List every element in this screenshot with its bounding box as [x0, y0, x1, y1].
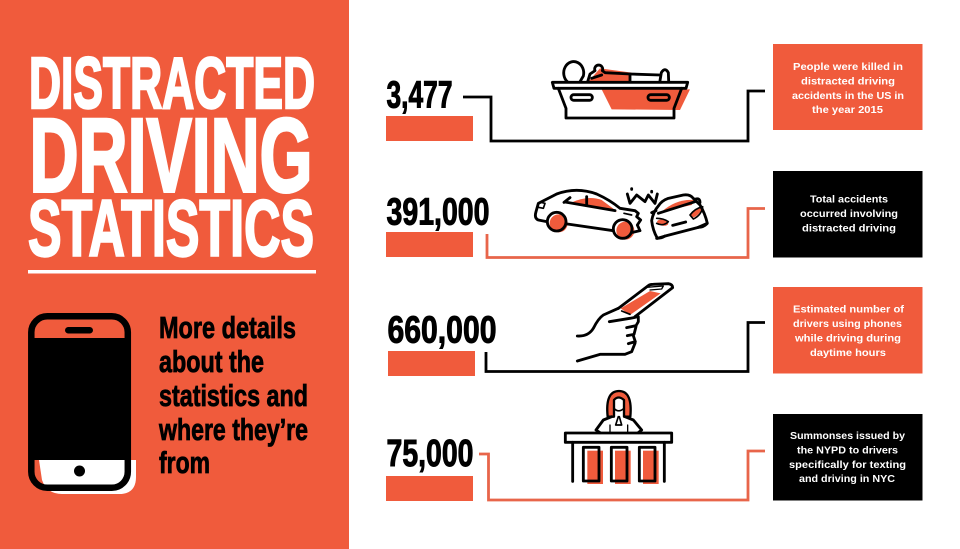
text block: more details [158, 310, 308, 480]
title: STATISTICS [28, 183, 314, 272]
panel: left title panel [0, 0, 349, 549]
text block: more details: statistics and [159, 378, 308, 413]
callout: people killed: the year 2015 [812, 104, 883, 116]
number: 75,000: 75,000 [386, 433, 474, 475]
callout: estimated drivers [773, 287, 922, 374]
callout: summonses: and driving in NYC [799, 473, 895, 485]
title: DISTRACTED [29, 44, 315, 124]
callout: summonses: the NYPD to drivers [797, 444, 898, 456]
icon: car crash [535, 189, 707, 240]
callout: total accidents: occurred involving [800, 208, 898, 220]
statistic row 1 [386, 44, 922, 141]
number: 391,000: 391,000 [386, 192, 490, 234]
title: DRIVING [30, 98, 312, 214]
icon: smartphone [31, 316, 136, 494]
number: 660,000: 660,000 [388, 310, 496, 352]
callout: people killed: distracted driving [801, 75, 895, 87]
callout: people killed: People were killed in [793, 61, 903, 73]
icon: hand holding phone [577, 284, 673, 361]
callout: summonses [773, 414, 922, 500]
icon: coffin [552, 62, 690, 118]
icon: judge at bench [565, 391, 672, 484]
callout: total accidents [773, 171, 922, 258]
callout: estimated drivers: daytime hours [810, 347, 886, 359]
text block: more details: from [159, 445, 210, 480]
callout: total accidents: Total accidents [810, 194, 888, 206]
callout: total accidents: distracted driving [802, 222, 896, 234]
callout: estimated drivers: drivers using phones [793, 318, 902, 330]
number: 3,477: 3,477 [386, 74, 452, 116]
callout: summonses: specifically for texting [789, 459, 906, 471]
statistic row 4 [386, 391, 922, 501]
statistic row 2 [386, 171, 922, 258]
text block: more details: More details [159, 310, 296, 345]
callout: estimated drivers: while driving during [794, 332, 901, 344]
callout: people killed [773, 44, 922, 130]
text block: more details: where they’re [158, 412, 308, 447]
text block: more details: about the [159, 344, 264, 379]
callout: estimated drivers: Estimated number of [793, 304, 905, 316]
callout: people killed: accidents in the US in [792, 90, 904, 102]
title [28, 44, 315, 272]
statistic row 3 [388, 284, 922, 376]
callout: summonses: Summonses issued by [790, 430, 905, 442]
